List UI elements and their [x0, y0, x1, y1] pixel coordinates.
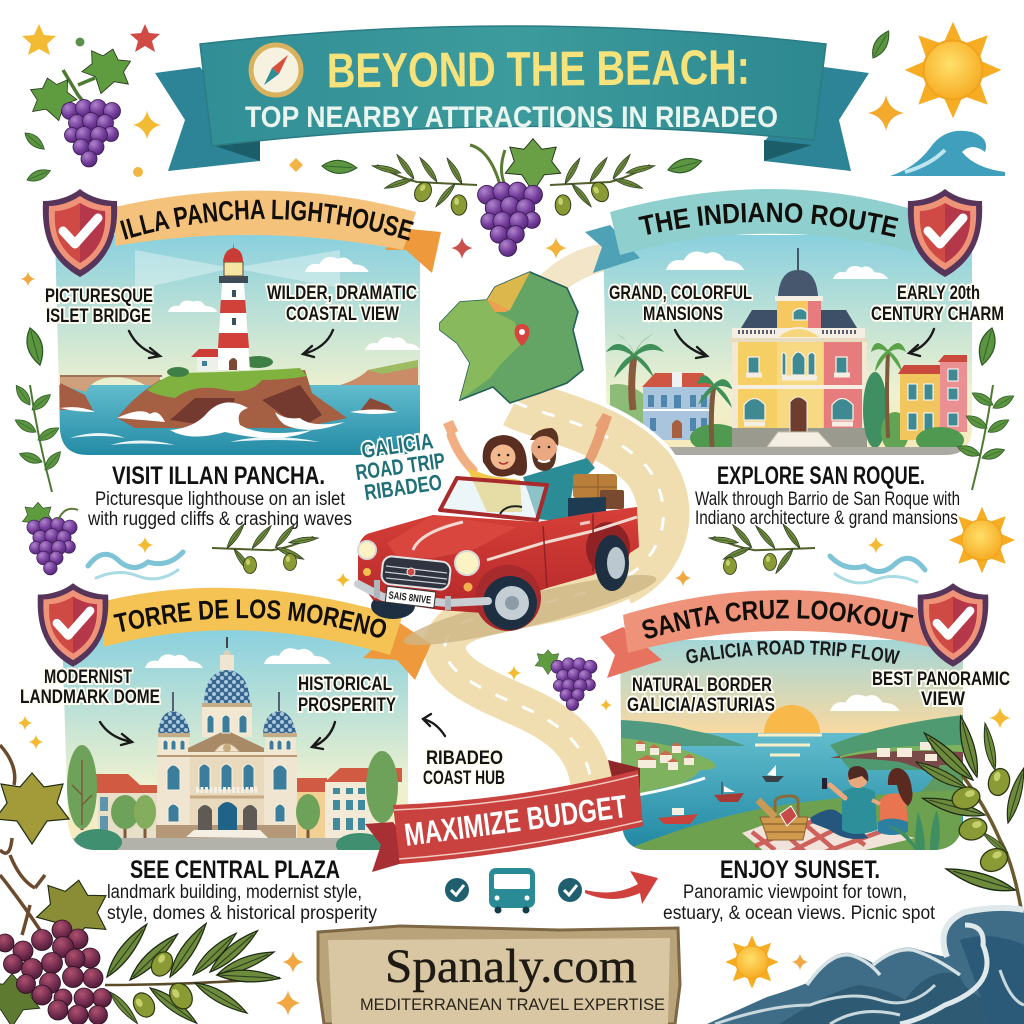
people — [810, 766, 912, 839]
plate — [385, 586, 436, 608]
scene: mansions — [600, 230, 975, 460]
decoration: top left — [22, 24, 303, 184]
wave — [707, 907, 1024, 1024]
label: grand colorful mansions — [609, 283, 752, 325]
arrow: to coast — [303, 330, 333, 357]
label: natural border — [627, 675, 775, 716]
arrow: to charm — [909, 329, 934, 356]
plaque: Spanaly — [318, 926, 680, 1024]
decoration: left side — [13, 272, 350, 587]
label: historical prosperity: HISTORICAL — [298, 674, 392, 695]
label: natural border: NATURAL BORDER — [632, 675, 772, 696]
brand name: Spanaly.com — [385, 940, 637, 993]
label: Ribadeo coast hub: COAST HUB — [423, 768, 505, 789]
icon: shield — [918, 583, 988, 667]
picnic basket — [758, 796, 808, 840]
label: Ribadeo coast hub — [423, 748, 505, 789]
ribbon: Torre de los Moreno — [103, 588, 431, 680]
caption: Enjoy sunset — [663, 856, 936, 924]
caption: Visit Illan Pancha: Picturesque lighthouse on an islet — [95, 489, 346, 510]
label: wilder coastal view: WILDER, DRAMATIC — [267, 283, 417, 304]
label: natural border: GALICIA/ASTURIAS — [627, 695, 775, 716]
label: wilder coastal view: COASTAL VIEW — [286, 304, 399, 325]
arrow: to dome — [100, 722, 132, 745]
budget flow icons — [445, 868, 658, 914]
road lower section — [445, 402, 663, 795]
grille — [381, 556, 451, 590]
blue house — [643, 387, 710, 440]
grand mansion — [730, 248, 868, 447]
panel: Santa Cruz lookout — [600, 583, 1012, 924]
caption: See Central Plaza: SEE CENTRAL PLAZA — [130, 856, 340, 884]
icon: shield — [908, 189, 982, 277]
right trees — [863, 372, 887, 448]
decoration: top right — [868, 22, 1005, 176]
decoration: bottom right olive and waves — [707, 707, 1024, 1024]
icon: bus — [489, 868, 535, 914]
caption: Visit Illan Pancha: VISIT ILLAN PANCHA. — [112, 462, 325, 490]
label: Ribadeo coast hub: RIBADEO — [426, 748, 503, 769]
label: early 20th century charm: EARLY 20th — [897, 283, 980, 304]
arrow: to mansions — [675, 330, 707, 358]
icon: shield — [43, 189, 117, 277]
caption: See Central Plaza: style, domes & historical prosperity — [107, 903, 377, 924]
tagline: MEDITERRANEAN TRAVEL EXPERTISE — [360, 995, 665, 1014]
title line 1: BEYOND THE BEACH: — [327, 41, 750, 99]
right houses — [900, 373, 940, 440]
caption: Enjoy sunset: ENJOY SUNSET. — [720, 856, 880, 884]
trees — [67, 745, 398, 857]
side text: Galicia road trip: RIBADEO — [363, 469, 443, 505]
label: modernist landmark dome — [20, 667, 160, 708]
caption: Visit Illan Pancha: with rugged cliffs & crashing waves — [87, 509, 352, 530]
icon: shield — [38, 583, 108, 667]
label: wilder coastal view — [267, 283, 417, 325]
panel: Illa Pancha lighthouse — [42, 189, 441, 530]
bumper — [358, 584, 488, 603]
ribbon: Santa Cruz lookout — [600, 590, 930, 678]
arrow: to bridge — [129, 331, 160, 358]
icon: compass — [251, 45, 301, 95]
title line 2: TOP NEARBY ATTRACTIONS IN RIBADEO — [245, 101, 778, 134]
luggage — [573, 474, 624, 509]
front wheel — [475, 565, 541, 631]
label: grand colorful mansions: MANSIONS — [643, 304, 723, 325]
far wheels — [371, 593, 415, 619]
ribbon: Torre de los Moreno: TORRE DE LOS MORENO — [113, 599, 386, 638]
scene: domed building — [55, 625, 415, 857]
caption: See Central Plaza — [107, 856, 377, 924]
label: best panoramic view: VIEW — [921, 689, 965, 710]
plate: SAIS 8NIVE — [388, 589, 432, 607]
couple — [443, 413, 612, 522]
label: modernist landmark dome: LANDMARK DOME — [20, 687, 160, 708]
caption: Enjoy sunset: estuary, & ocean views. Picnic spot — [663, 903, 936, 924]
lighthouse — [191, 243, 250, 371]
flow subtitle: GALICIA ROAD TRIP FLOW — [686, 640, 900, 664]
map of Galicia — [440, 272, 583, 403]
label: picturesque islet bridge: ISLET BRIDGE — [46, 306, 151, 327]
decoration: right side — [507, 326, 1016, 711]
lights — [358, 541, 376, 559]
ribbon: illa pancha: ILLA PANCHA LIGHTHOUSE — [120, 200, 414, 241]
side buildings — [98, 793, 158, 838]
arrow: to coast hub — [423, 714, 445, 736]
caption: Explore San Roque: Indiano architecture & grand mansions — [695, 508, 958, 529]
scene: lighthouse on islet — [50, 230, 425, 460]
road upper section — [520, 256, 612, 340]
bushes and palm — [690, 424, 732, 447]
label: grand colorful mansions: GRAND, COLORFUL — [609, 283, 752, 304]
side text: Galicia road trip: GALICIA — [360, 428, 435, 463]
icon: check — [558, 878, 582, 902]
ribbon: Indiano route: THE INDIANO ROUTE — [638, 202, 898, 238]
panel: Indiano route — [585, 189, 1004, 529]
label: picturesque islet bridge — [45, 286, 153, 327]
olive branch — [914, 715, 1024, 908]
label: best panoramic view — [872, 669, 1010, 710]
label: picturesque islet bridge: PICTURESQUE — [45, 286, 153, 307]
scene: estuary at sunset — [615, 635, 965, 856]
label: historical prosperity: PROSPERITY — [298, 695, 396, 716]
panel: Torre de los Moreno — [20, 583, 431, 924]
decoration: top centre vine — [322, 139, 703, 259]
caption: Explore San Roque: EXPLORE SAN ROQUE. — [717, 462, 925, 490]
ribbon: Indiano route — [585, 189, 913, 273]
caption: Visit Illan Pancha — [87, 462, 352, 530]
main building — [156, 637, 297, 838]
ribbon: Santa Cruz lookout: SANTA CRUZ LOOKOUT — [642, 600, 914, 638]
ribbon: illa pancha — [115, 190, 441, 273]
palm left — [632, 355, 634, 410]
windshield — [440, 478, 547, 520]
olive branch — [102, 920, 280, 1024]
caption: See Central Plaza: landmark building, modernist style, — [107, 882, 362, 903]
caption: Explore San Roque — [695, 462, 960, 529]
ribbon: maximize budget — [365, 760, 643, 872]
side text: Galicia road trip: ROAD TRIP — [354, 448, 447, 485]
label: early 20th century charm — [871, 283, 1004, 325]
decoration: bottom left vines — [0, 716, 304, 1024]
side text: Galicia road trip — [351, 427, 449, 506]
caption: Explore San Roque: Walk through Barrio de San Roque with — [695, 489, 960, 510]
caption: Enjoy sunset: Panoramic viewpoint for town, — [683, 882, 907, 903]
icon: check — [445, 878, 469, 902]
ribbon: maximize budget: MAXIMIZE BUDGET — [402, 788, 629, 853]
body — [358, 507, 639, 613]
car with couple — [358, 413, 660, 657]
arrow: to building — [312, 722, 335, 749]
title banner — [155, 26, 869, 171]
arrow: red — [585, 871, 658, 904]
label: historical prosperity — [298, 674, 396, 716]
label: modernist landmark dome: MODERNIST — [44, 667, 132, 688]
